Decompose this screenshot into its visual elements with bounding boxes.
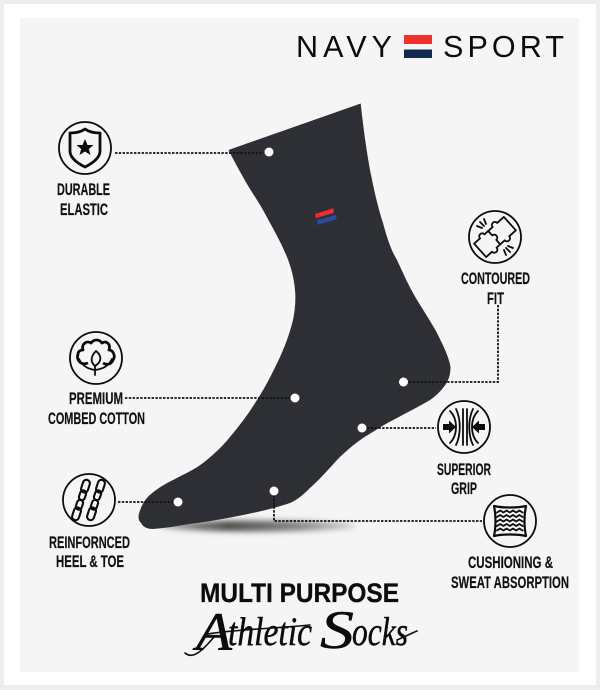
label: durable elastic [57,181,110,219]
leader line: superior grip [367,427,436,429]
label: durable elastic: DURABLE [57,181,110,199]
label: contoured fit: CONTOURED [461,270,530,288]
label: superior grip [437,461,491,498]
heading: athletic socks: A [193,602,233,662]
swash strokes [185,625,417,655]
icon: compression arrows [438,401,490,453]
label: contoured fit: FIT [487,290,504,308]
feature: premium combed cotton [48,332,145,428]
heading: athletic socks: ocks [352,609,408,654]
leader line: cushioning [274,495,482,521]
icon: chain links [63,474,115,526]
label: reinforced heel and toe: REINFORNCED [49,534,130,552]
icon: cotton boll [70,332,122,384]
icon: puzzle pieces [469,211,521,263]
feature: contoured fit [461,211,530,308]
brand logo: Navy Sport: NAVY [296,30,392,64]
icon: pillow [484,495,536,547]
leader line: durable elastic [115,152,264,154]
sock logo stripes [315,208,337,225]
icon: shield with star [59,122,111,174]
label: premium combed cotton: COMBED COTTON [48,410,145,428]
marker dots [174,148,408,506]
heading: athletic socks: S [320,600,354,660]
label: cushioning and sweat absorption: CUSHIONING & [468,554,553,572]
label: reinforced heel and toe: HEEL & TOE [56,553,124,571]
feature: cushioning and sweat absorption [451,495,569,592]
heading: multi purpose: MULTI PURPOSE [200,578,399,608]
heading: athletic socks [185,600,417,662]
brand logo: Navy Sport [296,30,564,64]
label: reinforced heel and toe [49,534,130,571]
leader line: contoured fit [408,305,498,382]
sock shadow [160,520,356,532]
label: premium combed cotton: PREMIUM [69,390,123,408]
label: premium combed cotton [48,390,145,428]
brand logo: Navy Sport: SPORT [443,30,564,64]
feature: durable elastic [57,122,111,219]
heading: athletic socks: thletic [228,609,312,654]
label: superior grip: GRIP [451,480,477,498]
feature: superior grip [437,401,491,498]
label: superior grip: SUPERIOR [437,461,491,479]
sock illustration [139,104,451,529]
leader line: premium combed cotton [125,397,290,399]
label: contoured fit [461,270,530,308]
feature: reinforced heel and toe [49,474,130,571]
label: durable elastic: ELASTIC [60,201,108,219]
leader line: reinforced heel and toe [118,501,173,503]
label: cushioning and sweat absorption [451,554,569,592]
